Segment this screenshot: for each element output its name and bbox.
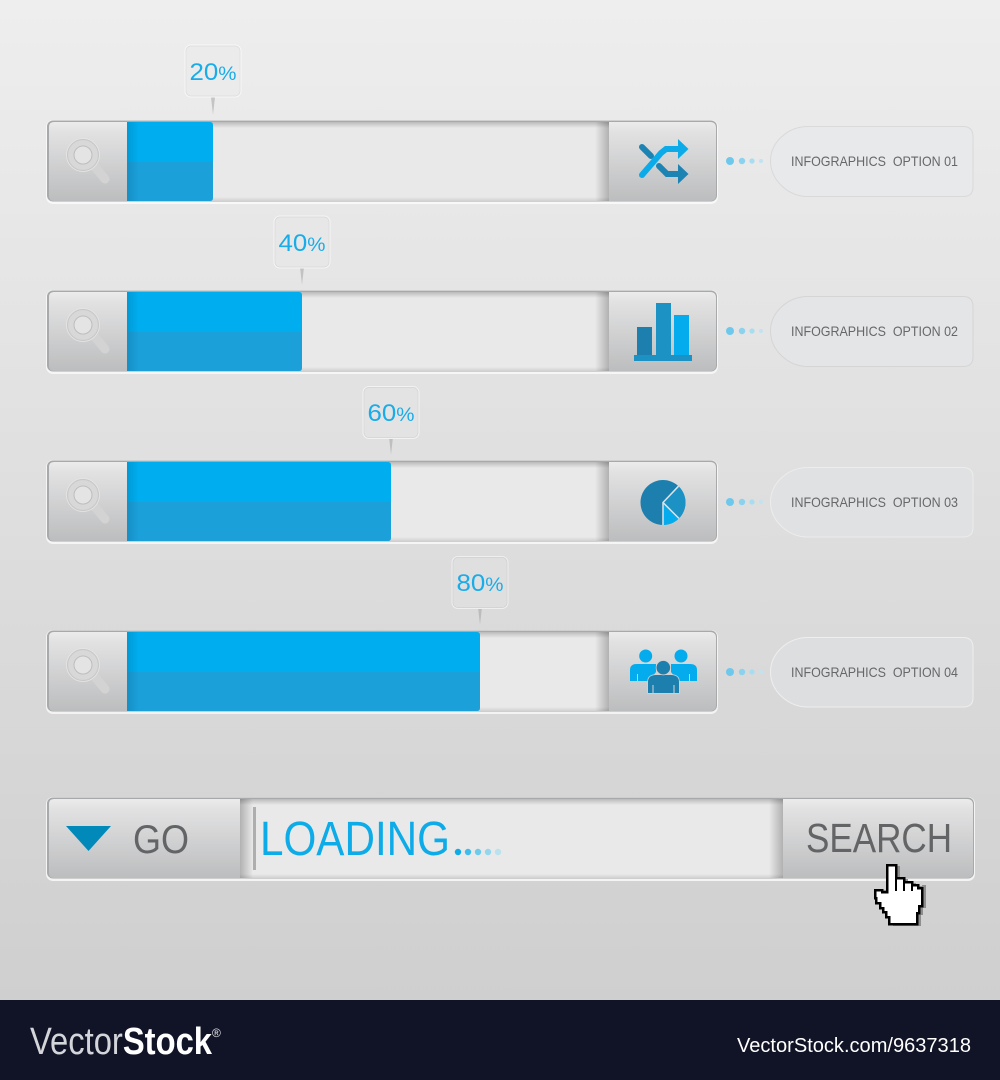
progress fill 80% bbox=[127, 632, 480, 711]
panel: search bar bbox=[46, 797, 975, 881]
tooltip: 80%: 80% bbox=[456, 570, 504, 597]
connector dots bbox=[726, 157, 763, 165]
option label 04 bbox=[770, 638, 973, 707]
progress bar frame bbox=[46, 120, 718, 204]
search button bbox=[783, 799, 973, 878]
icon: pixel hand cursor bbox=[875, 865, 926, 926]
option label 02 bbox=[770, 296, 973, 366]
icon: dropdown triangle bbox=[66, 826, 111, 851]
tooltip: 40% bbox=[274, 216, 330, 285]
loading text: LOADING bbox=[260, 813, 450, 866]
footer band bbox=[0, 1000, 1000, 1080]
tooltip: 80% bbox=[452, 556, 508, 625]
search button with magnifier icon bbox=[49, 292, 127, 371]
progress bar frame bbox=[46, 290, 718, 374]
progress bar frame bbox=[46, 460, 718, 544]
progress fill 40% bbox=[127, 292, 302, 371]
go button bbox=[49, 799, 240, 878]
progress fill 20% bbox=[127, 122, 213, 201]
right button with bar chart icon bbox=[609, 292, 716, 371]
panel: progress row 3 (60%) bbox=[46, 386, 973, 544]
search button: SEARCH bbox=[806, 815, 952, 861]
footer id text: VectorStock.com/9637318 bbox=[737, 1035, 971, 1057]
progress bar frame bbox=[46, 630, 718, 714]
tooltip: 20% bbox=[185, 45, 241, 115]
option label 03 bbox=[770, 468, 973, 537]
right button with people icon bbox=[609, 632, 716, 711]
search button with magnifier icon bbox=[49, 632, 127, 711]
search button with magnifier icon bbox=[49, 462, 127, 541]
right button with pie chart icon bbox=[609, 462, 716, 541]
search bar frame bbox=[46, 797, 975, 881]
connector dots bbox=[726, 498, 763, 506]
panel: progress row 2 (40%) bbox=[46, 216, 973, 374]
search button with magnifier icon bbox=[49, 122, 127, 201]
option label 02: INFOGRAPHICS OPTION 02 bbox=[791, 323, 958, 339]
go button: GO bbox=[133, 818, 189, 862]
panel: progress row 4 (80%) bbox=[46, 556, 973, 714]
option label 03: INFOGRAPHICS OPTION 03 bbox=[791, 494, 958, 510]
connector dots bbox=[726, 327, 763, 335]
option label 01 bbox=[770, 126, 973, 196]
footer logo: VectorStock bbox=[30, 1021, 213, 1063]
panel: progress row 1 (20%) bbox=[46, 45, 973, 204]
tooltip: 20%: 20% bbox=[190, 59, 237, 86]
option label 01: INFOGRAPHICS OPTION 01 bbox=[791, 153, 958, 169]
registered mark: ® bbox=[212, 1026, 221, 1040]
progress fill 60% bbox=[127, 462, 391, 541]
connector dots bbox=[726, 668, 763, 676]
tooltip: 60%: 60% bbox=[368, 400, 415, 427]
right button with shuffle icon bbox=[609, 122, 716, 201]
option label 04: INFOGRAPHICS OPTION 04 bbox=[791, 664, 958, 680]
tooltip: 40%: 40% bbox=[278, 230, 326, 257]
tooltip: 60% bbox=[363, 386, 419, 455]
